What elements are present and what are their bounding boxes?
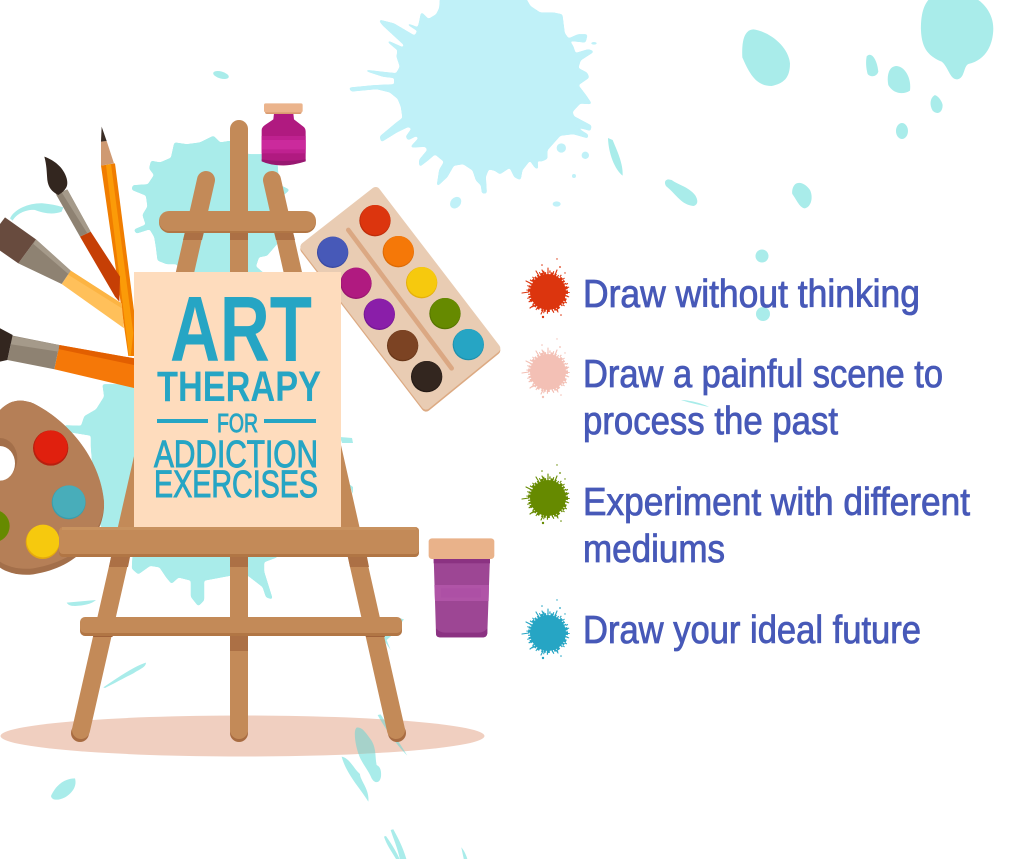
icon: thin paintbrush [44, 157, 120, 302]
art supplies: pencil and brushes [0, 127, 134, 388]
title: ADDICTION: ADDICTION [154, 434, 318, 476]
list item 2 [522, 338, 943, 443]
text: draw a painful scene: Draw a painful scene to [583, 353, 943, 396]
splash: small teal drops near list [212, 70, 770, 407]
icon: wide paintbrush [0, 217, 124, 328]
icon: paint cup [429, 538, 494, 637]
text: draw without thinking: Draw without thinking [583, 273, 920, 316]
icon: watercolour paint tray [305, 192, 496, 407]
easel lower crossbar [80, 617, 402, 636]
easel canvas ledge [59, 527, 419, 557]
easel [71, 129, 406, 742]
list item 1 [522, 258, 920, 318]
splash: large light blue splatter at top [350, 0, 597, 211]
icon: pencil [101, 127, 134, 356]
text: draw a painful scene [583, 353, 943, 443]
title: FOR with rules [157, 408, 316, 438]
panel: canvas with title [134, 272, 341, 527]
title: EXERCISES: EXERCISES [154, 464, 318, 506]
text: experiment with different mediums: mediums [583, 528, 725, 571]
icon: blue paint splat [522, 599, 568, 659]
icon: orange paintbrush [0, 328, 134, 388]
easel feet [71, 724, 406, 742]
splash: teal drops at top right [608, 0, 993, 208]
easel leg shadows [93, 232, 385, 651]
icon: pink paint splat [522, 338, 568, 398]
icon: wooden artist palette [0, 401, 104, 575]
icon: red paint splat [522, 258, 568, 318]
easel ground shadow [0, 716, 484, 756]
list item 3 [522, 464, 970, 571]
text: draw a painful scene: process the past [583, 400, 838, 443]
text: experiment with different mediums [583, 481, 970, 571]
icon: ink bottle [262, 103, 306, 165]
icon: green paint splat [522, 464, 568, 524]
title: THERAPY: THERAPY [157, 363, 321, 411]
easel upper crossbar [159, 211, 316, 233]
title: FOR with rules: FOR [217, 408, 258, 438]
text: experiment with different mediums: Experiment with different [583, 481, 970, 524]
list item 4 [522, 599, 921, 659]
splash: teal splatter behind easel, lower [65, 385, 353, 605]
splash: small teal streaks at bottom [51, 600, 468, 859]
easel legs [81, 129, 396, 730]
title: ART: ART [170, 277, 312, 381]
text: draw your ideal future: Draw your ideal future [583, 609, 921, 652]
splash: teal splatter behind easel, upper [10, 137, 288, 277]
